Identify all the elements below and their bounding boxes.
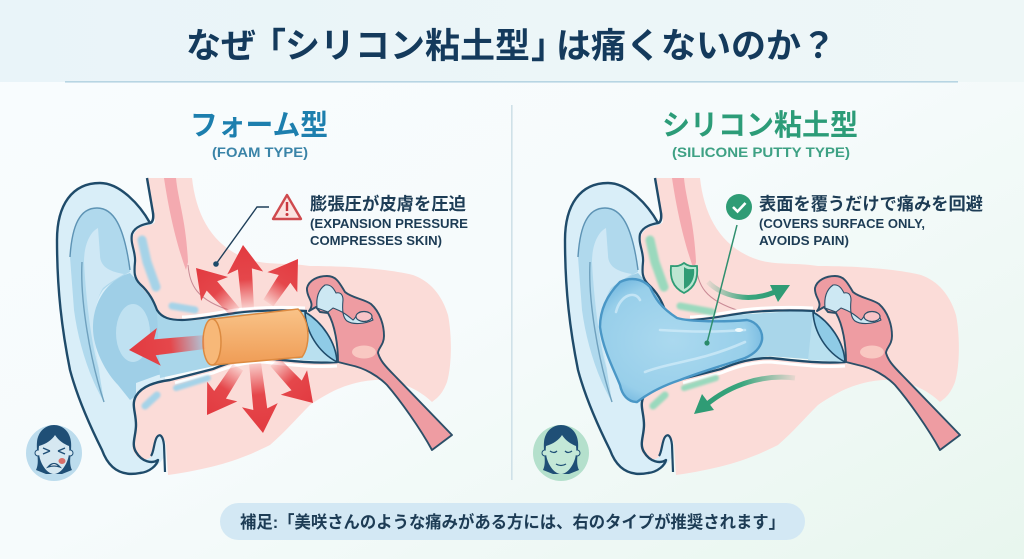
pressure arrows xyxy=(127,244,326,435)
leader line xyxy=(707,225,737,343)
heading: silicone putty type: シリコン粘土型 xyxy=(662,109,858,142)
ear anatomy: putty side xyxy=(565,178,960,475)
note pill xyxy=(220,503,805,540)
callout: covers surface xyxy=(704,194,983,346)
soft tissue bands xyxy=(142,240,208,406)
arrow: lower flow xyxy=(694,377,795,414)
icon: check badge xyxy=(726,194,752,220)
callout: expansion pressure: (EXPANSION PRESSURE xyxy=(310,216,468,231)
note pill: 補足:「美咲さんのような痛みがある方には、右のタイプが推奨されます」 xyxy=(240,512,785,532)
callout: covers surface: 表面を覆うだけで痛みを回避 xyxy=(759,194,983,214)
icon: shield xyxy=(671,263,697,293)
arrow: upper flow xyxy=(708,282,790,302)
soft tissue bands xyxy=(650,240,716,406)
heading: silicone putty type: (SILICONE PUTTY TYPE) xyxy=(672,145,850,160)
icon: warning triangle xyxy=(273,195,301,219)
putty plug xyxy=(600,279,762,402)
callout: expansion pressure xyxy=(213,194,468,267)
panel: foam type xyxy=(26,109,468,481)
callout: expansion pressure: 膨張圧が皮膚を圧迫 xyxy=(310,194,466,214)
header band xyxy=(0,0,1024,82)
flow arrows xyxy=(694,282,795,414)
heading: silicone putty type xyxy=(662,109,858,160)
title: 」 xyxy=(531,27,566,66)
heading: foam type: フォーム型 xyxy=(190,109,328,142)
heading: foam type: (FOAM TYPE) xyxy=(212,145,308,160)
callout: expansion pressure: COMPRESSES SKIN) xyxy=(310,233,442,248)
title: は痛くないのか？ xyxy=(556,27,836,66)
leader line xyxy=(216,207,269,264)
callout: covers surface: AVOIDS PAIN) xyxy=(759,233,849,248)
icon: calm face xyxy=(533,425,589,481)
title: なぜ xyxy=(186,27,256,66)
callout: covers surface: (COVERS SURFACE ONLY, xyxy=(759,216,925,231)
heading: foam type xyxy=(190,109,328,160)
ear anatomy: foam side xyxy=(57,178,452,475)
title: シリコン粘土型 xyxy=(285,27,530,66)
panel: silicone putty type xyxy=(533,109,983,481)
icon: foam plug xyxy=(203,309,308,365)
icon: face in pain xyxy=(26,425,82,481)
title: 「 xyxy=(251,27,286,66)
